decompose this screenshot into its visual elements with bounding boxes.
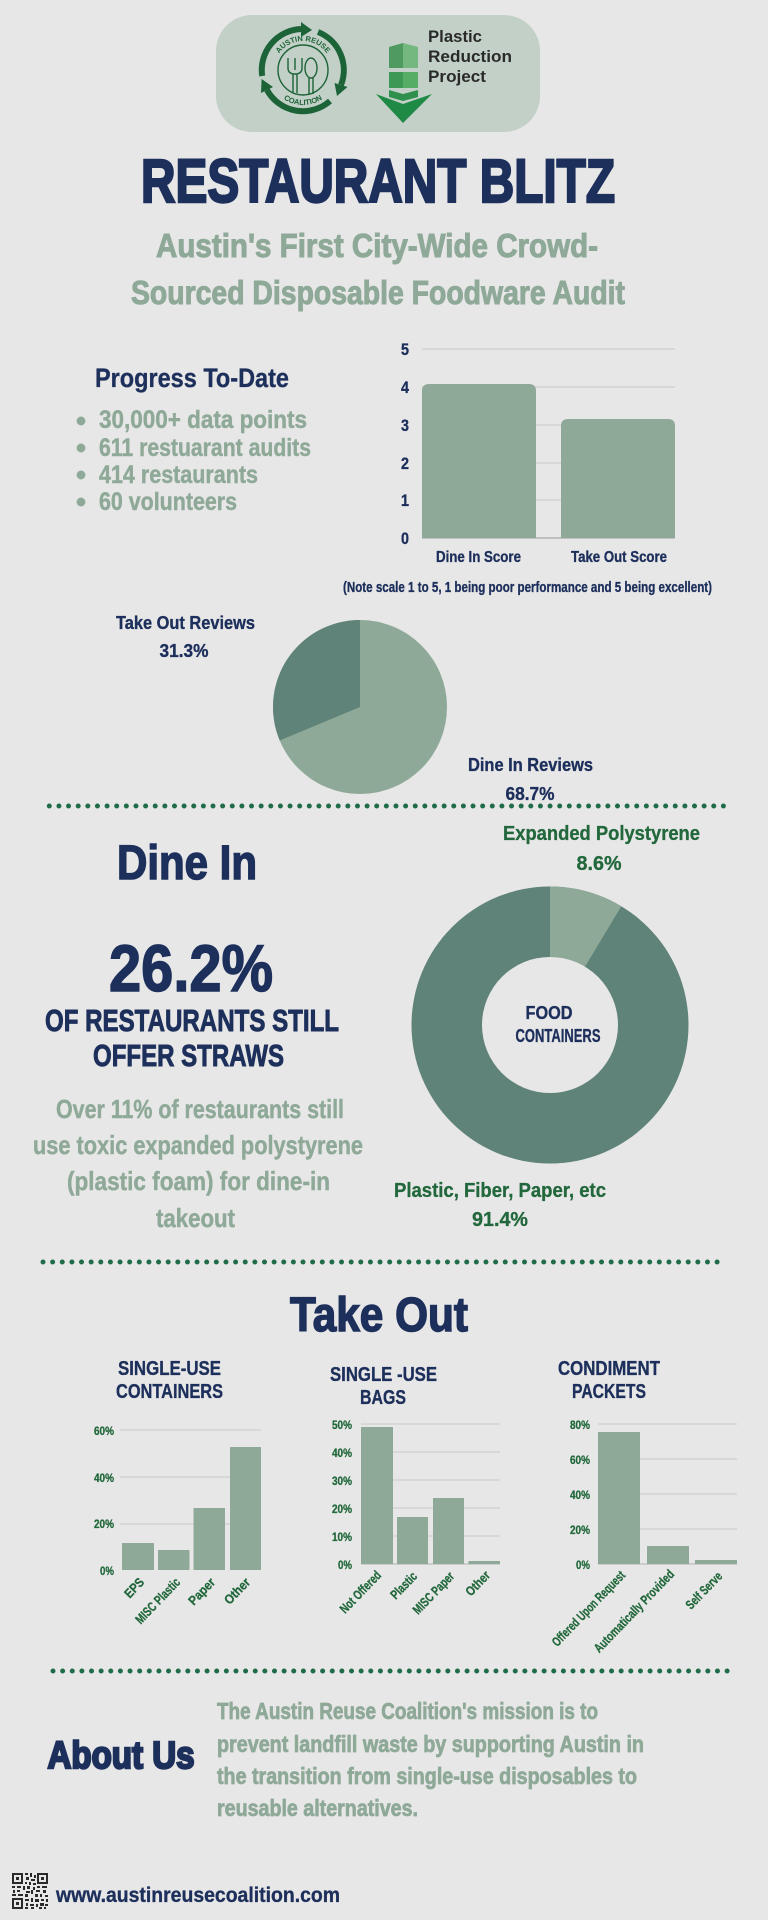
pie label: take out reviews: Take Out Reviews <box>116 613 255 633</box>
bar chart: dine in vs take out score: 0 <box>401 529 409 548</box>
bar chart: condiment packets: 80% <box>570 1418 590 1432</box>
donut label: expanded polystyrene: Expanded Polystyrene <box>503 823 700 845</box>
donut label: plastic, fiber, paper: 91.4% <box>472 1209 528 1231</box>
bar chart: single-use containers: Other <box>221 1575 253 1607</box>
text block: mission statement: The Austin Reuse Coalition's mission is to <box>217 1698 598 1724</box>
heading: about us: About Us <box>48 1735 194 1777</box>
bar chart: single-use bags <box>332 1418 500 1617</box>
chart title: single-use containers: SINGLE-USE <box>118 1358 221 1380</box>
progress bullet list <box>77 406 311 516</box>
bar chart: single-use bags: MISC Paper <box>410 1569 457 1617</box>
text block: expanded polystyrene note <box>33 1094 363 1233</box>
text block: mission statement <box>217 1698 644 1821</box>
bar chart: condiment packets: Self Serve <box>682 1569 725 1612</box>
bar chart: condiment packets: 0% <box>576 1558 590 1572</box>
bar chart: single-use bags: Not Offered <box>337 1568 384 1616</box>
heading: dine in: Dine In <box>117 837 257 890</box>
icon: Austin Reuse Coalition logo: AUSTIN REUSE <box>276 36 331 54</box>
bar chart: single-use containers: 20% <box>94 1517 114 1531</box>
donut label: expanded polystyrene <box>503 823 700 875</box>
bar chart: single-use bags: 0% <box>338 1558 352 1572</box>
bar chart: single-use containers: 0% <box>100 1564 114 1578</box>
bar chart: dine in vs take out score: Take Out Score <box>571 549 667 566</box>
bar chart: single-use bags: 20% <box>332 1502 352 1516</box>
bar chart: dine in vs take out score: 5 <box>401 340 409 359</box>
title: RESTAURANT BLITZ <box>141 147 615 215</box>
chart title: single-use bags: SINGLE -USE <box>330 1364 437 1386</box>
bar chart: single-use containers: 60% <box>94 1424 114 1438</box>
bar chart: dine in vs take out score: 4 <box>401 378 409 397</box>
bar chart: single-use bags: 10% <box>332 1530 352 1544</box>
icon: Austin Reuse Coalition logo <box>258 22 348 114</box>
statistic: straws: 26.2% <box>109 931 273 1005</box>
statistic: straws: OFFER STRAWS <box>93 1038 284 1073</box>
bar chart: dine in vs take out score: 2 <box>401 454 409 473</box>
subtitle <box>131 227 625 311</box>
bar chart: dine in vs take out score: 1 <box>401 491 409 510</box>
bar chart: dine in vs take out score <box>401 340 675 566</box>
bar chart: single-use containers: MISC Plastic <box>132 1575 183 1627</box>
pie label: dine in reviews: 68.7% <box>506 784 554 804</box>
project name text <box>428 27 512 86</box>
chart title: single-use containers <box>116 1358 223 1403</box>
bar chart: single-use containers <box>94 1424 261 1627</box>
statistic: straws <box>45 931 339 1073</box>
bar chart: single-use containers: EPS <box>121 1574 147 1601</box>
donut label: plastic, fiber, paper <box>394 1180 606 1231</box>
pie label: dine in reviews: Dine In Reviews <box>468 755 593 775</box>
bar chart: single-use bags: 30% <box>332 1474 352 1488</box>
pie label: take out reviews <box>116 613 255 661</box>
icon: Plastic Reduction Project arrow <box>376 43 432 123</box>
donut chart: food containers: CONTAINERS <box>516 1026 600 1046</box>
progress bullet list: 60 volunteers <box>99 488 237 516</box>
donut chart: food containers: FOOD <box>526 1003 572 1023</box>
bar chart: condiment packets: 60% <box>570 1453 590 1467</box>
chart title: condiment packets: PACKETS <box>572 1381 646 1403</box>
bar chart: condiment packets: Automatically Provided <box>591 1567 677 1655</box>
subtitle: Austin's First City-Wide Crowd- <box>156 227 598 264</box>
text block: expanded polystyrene note: Over 11% of restaurants still <box>56 1094 344 1124</box>
chart title: single-use bags: BAGS <box>360 1387 406 1409</box>
project name text: Plastic <box>428 27 482 46</box>
pie label: dine in reviews <box>468 755 593 804</box>
heading: progress to-date: Progress To-Date <box>95 363 289 393</box>
bar chart: single-use bags: Plastic <box>387 1569 420 1602</box>
chart title: condiment packets <box>558 1358 660 1403</box>
website url: www.austinreusecoalition.com <box>55 1884 340 1907</box>
donut chart: food containers <box>412 886 688 1164</box>
donut label: expanded polystyrene: 8.6% <box>576 853 622 875</box>
bar chart: condiment packets <box>549 1418 737 1655</box>
header logo panel <box>216 15 540 132</box>
bar chart: condiment packets: 20% <box>570 1523 590 1537</box>
icon: Austin Reuse Coalition logo: COALITION <box>284 94 322 106</box>
bar chart: single-use bags: 50% <box>332 1418 352 1432</box>
bar chart: single-use bags: Other <box>462 1568 493 1599</box>
text block: expanded polystyrene note: takeout <box>156 1203 235 1233</box>
bar chart: dine in vs take out score: Dine In Score <box>436 549 521 566</box>
subtitle: Sourced Disposable Foodware Audit <box>131 274 625 311</box>
bar chart: condiment packets: Offered Upon Request <box>549 1567 628 1649</box>
bar chart: dine in vs take out score: 3 <box>401 416 409 435</box>
text block: mission statement: prevent landfill waste by supporting Austin in <box>217 1731 644 1757</box>
text block: expanded polystyrene note: use toxic expanded polystyrene <box>33 1130 363 1160</box>
heading: take out: Take Out <box>290 1289 468 1342</box>
project name text: Project <box>428 67 486 86</box>
text block: mission statement: reusable alternatives. <box>217 1795 418 1821</box>
pie label: take out reviews: 31.3% <box>160 641 208 661</box>
donut label: plastic, fiber, paper: Plastic, Fiber, Paper, etc <box>394 1180 606 1202</box>
icon: QR code <box>12 1873 48 1909</box>
text block: mission statement: the transition from single-use disposables to <box>217 1763 637 1789</box>
chart title: condiment packets: CONDIMENT <box>558 1358 660 1380</box>
progress bullet list: 414 restaurants <box>99 461 258 489</box>
statistic: straws: OF RESTAURANTS STILL <box>45 1003 339 1038</box>
chart title: single-use containers: CONTAINERS <box>116 1381 223 1403</box>
bar chart: single-use containers: Paper <box>185 1575 218 1608</box>
project name text: Reduction <box>428 47 512 66</box>
chart title: single-use bags <box>330 1364 437 1409</box>
progress bullet list: 611 restuarant audits <box>99 434 311 462</box>
bar chart: single-use containers: 40% <box>94 1471 114 1485</box>
bar chart: single-use bags: 40% <box>332 1446 352 1460</box>
progress bullet list: 30,000+ data points <box>99 406 307 434</box>
text block: expanded polystyrene note: (plastic foam) for dine-in <box>67 1166 330 1196</box>
pie chart: review share <box>273 620 447 794</box>
bar chart: condiment packets: 40% <box>570 1488 590 1502</box>
